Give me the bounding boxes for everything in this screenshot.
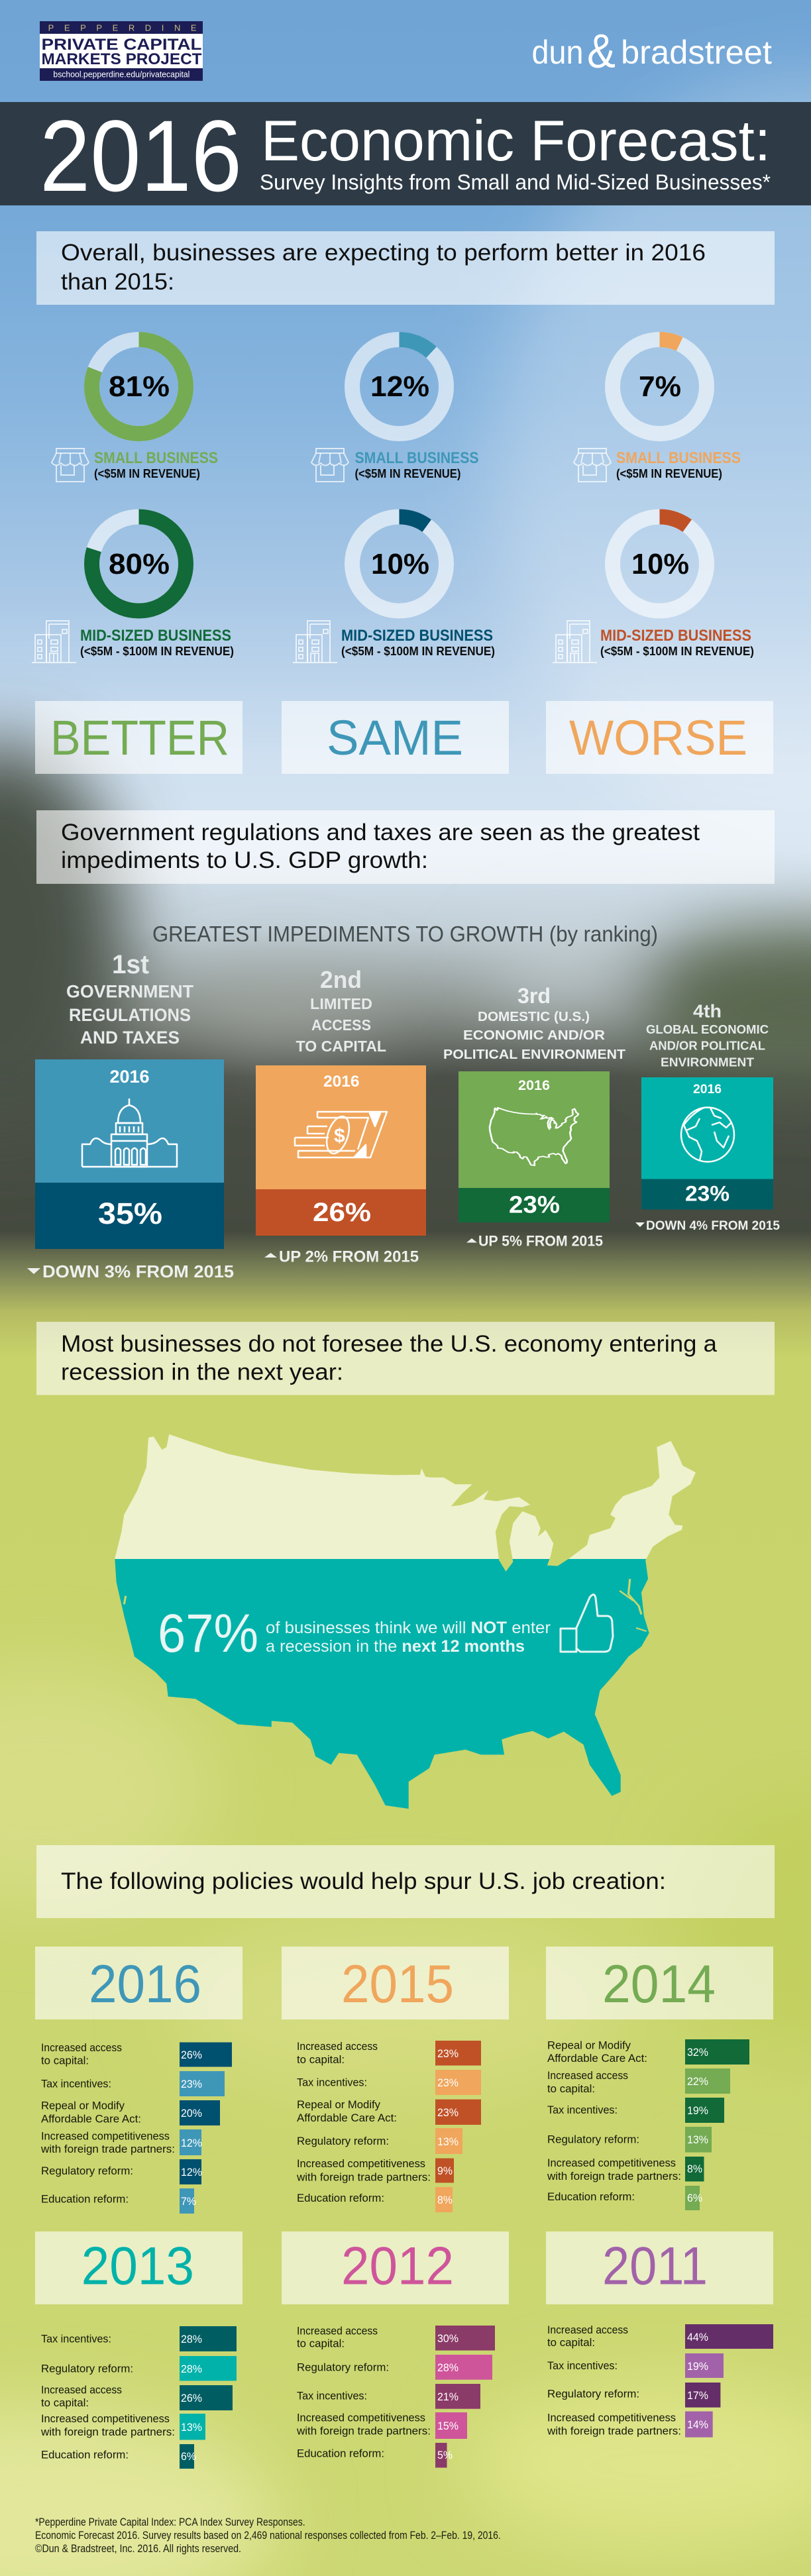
bar chart: 2012 policies: to capital: xyxy=(297,2338,345,2350)
icon: capitol building xyxy=(82,1099,177,1167)
bar chart: 2016 policies: 20% xyxy=(181,2107,202,2120)
label: mid-sized worse: MID-SIZED BUSINESS xyxy=(600,627,751,645)
callout: 67 percent xyxy=(158,1603,551,1664)
change: down 3%: DOWN 3% FROM 2015 xyxy=(42,1261,234,1281)
panel: heading job creation policies xyxy=(36,1845,775,1918)
bar chart: 2012 policies: 21% xyxy=(437,2390,459,2403)
bar chart: 2011 policies: 14% xyxy=(687,2418,708,2431)
bar chart: 2013 policies: Education reform: xyxy=(41,2449,129,2461)
label: small business better: SMALL BUSINESS xyxy=(94,449,218,467)
donut: small business better 81%: 81% xyxy=(109,370,170,403)
bar chart: 2012 policies: 15% xyxy=(437,2420,459,2432)
rank 2: limited access to capital: 2016 xyxy=(323,1073,359,1091)
bar chart: 2015 policies: 8% xyxy=(437,2194,453,2206)
legend: same: SAME xyxy=(327,710,463,765)
rank 3 heading: 3rd xyxy=(517,984,551,1008)
rank 4: global economic and political environment: 2016 xyxy=(693,1083,722,1097)
bar chart: 2015 policies xyxy=(296,2041,481,2212)
bar chart: 2016 policies: Regulatory reform: xyxy=(41,2165,133,2177)
title banner: 2016 xyxy=(40,99,242,213)
panel: heading recession xyxy=(36,1322,775,1395)
year box: 2012: 2012 xyxy=(341,2237,454,2296)
bar chart: 2014 policies: Tax incentives: xyxy=(547,2104,618,2116)
label: small business same xyxy=(311,449,478,482)
logo: dun & bradstreet: & xyxy=(587,25,616,78)
icon: flying money xyxy=(295,1112,387,1157)
bar chart: 2012 policies: with foreign trade partners: xyxy=(296,2425,431,2437)
change: up 2%: UP 2% FROM 2015 xyxy=(279,1248,419,1265)
chart title: GREATEST IMPEDIMENTS TO GROWTH (by ranking) xyxy=(152,922,658,946)
bar chart: 2016 policies: Increased competitiveness xyxy=(41,2130,170,2142)
bar chart: 2015 policies: Repeal or Modify xyxy=(297,2099,381,2111)
bar chart: 2014 policies: 19% xyxy=(687,2104,708,2117)
bar chart: 2014 policies: Regulatory reform: xyxy=(547,2134,639,2146)
rank 1 heading: 1st xyxy=(112,950,149,979)
bar chart: 2014 policies: with foreign trade partners: xyxy=(547,2171,681,2182)
rank 3 heading: POLITICAL ENVIRONMENT xyxy=(443,1047,625,1062)
bar chart: 2014 policies: 22% xyxy=(687,2075,708,2088)
donut: mid-sized better 80% xyxy=(91,517,186,611)
bar chart: 2012 policies: Increased access xyxy=(297,2326,378,2337)
rank 3 card xyxy=(459,1071,610,1188)
bar chart: 2014 policies: 6% xyxy=(687,2192,702,2204)
rank 3 heading: ECONOMIC AND/OR xyxy=(463,1028,606,1043)
logo: dun & bradstreet: bradstreet xyxy=(621,34,772,71)
year box: 2014: 2014 xyxy=(602,1955,716,2014)
rank 3 heading: DOMESTIC (U.S.) xyxy=(478,1010,590,1024)
bar chart: 2013 policies xyxy=(40,2326,237,2469)
bar chart: 2015 policies: Tax incentives: xyxy=(297,2077,367,2089)
label: small business same: (<$5M IN REVENUE) xyxy=(355,467,461,480)
rank 2 heading: LIMITED xyxy=(310,995,372,1012)
bar chart: 2016 policies: Affordable Care Act: xyxy=(41,2114,141,2125)
year box: 2013: 2013 xyxy=(81,2237,194,2296)
bar chart: 2015 policies: 9% xyxy=(437,2165,453,2177)
bar chart: 2015 policies: with foreign trade partners: xyxy=(296,2171,431,2183)
panel: heading recession: Most businesses do not foresee the U.S. economy entering a xyxy=(61,1331,718,1357)
bar chart: 2016 policies: Education reform: xyxy=(41,2194,129,2206)
bar chart: 2014 policies: 13% xyxy=(687,2133,708,2146)
callout: 67 percent: of businesses think we will NOT enter xyxy=(266,1619,551,1637)
bar chart: 2012 policies: 28% xyxy=(437,2361,459,2374)
bar chart: 2015 policies: 23% xyxy=(437,2106,459,2119)
bar chart: 2011 policies: Tax incentives: xyxy=(547,2360,618,2372)
footer notes: ©Dun & Bradstreet, Inc. 2016. All rights reserved. xyxy=(35,2542,241,2555)
rank 4: global economic and political environment xyxy=(635,1001,780,1233)
bar chart: 2015 policies: 23% xyxy=(437,2047,459,2060)
rank 1 heading: GOVERNMENT xyxy=(66,982,193,1002)
legend: same xyxy=(282,701,509,774)
bar chart: 2015 policies: Increased access xyxy=(297,2041,378,2053)
bar chart: 2013 policies: 28% xyxy=(181,2333,202,2345)
donut: mid-sized better 80%: 80% xyxy=(109,548,170,580)
bar chart: 2014 policies xyxy=(547,2039,749,2210)
bar chart: 2014 policies: Increased competitiveness xyxy=(547,2157,676,2169)
donut: small business better 81% xyxy=(91,339,186,433)
bar chart: 2016 policies: with foreign trade partners: xyxy=(40,2143,175,2155)
bar chart: 2014 policies: 32% xyxy=(687,2046,708,2059)
bar chart: 2012 policies: 5% xyxy=(437,2449,453,2461)
bar chart: 2011 policies: with foreign trade partners: xyxy=(547,2425,681,2437)
bar chart: 2012 policies: 30% xyxy=(437,2332,459,2345)
year box: 2014 xyxy=(546,1947,773,2019)
change: up 5%: UP 5% FROM 2015 xyxy=(478,1232,603,1250)
label: mid-sized better: (<$5M - $100M IN REVENUE) xyxy=(80,645,234,658)
footer notes: Economic Forecast 2016. Survey results based on 2,469 national responses collected from Feb. 2–Feb. 19, 2016. xyxy=(35,2529,501,2542)
bar chart: 2013 policies: Increased competitiveness xyxy=(41,2413,170,2425)
label: small business worse: SMALL BUSINESS xyxy=(616,449,741,467)
label: small business same: SMALL BUSINESS xyxy=(355,449,478,467)
panel: heading overall expectations: Overall, businesses are expecting to perform better in 2016 xyxy=(61,240,706,266)
bar chart: 2013 policies: 13% xyxy=(181,2421,202,2434)
callout: 67 percent: 67% xyxy=(158,1603,258,1664)
footer notes: *Pepperdine Private Capital Index: PCA Index Survey Responses. xyxy=(35,2516,305,2528)
rank 2 heading: TO CAPITAL xyxy=(296,1038,386,1055)
year box: 2012 xyxy=(282,2231,509,2304)
icon: globe xyxy=(681,1108,734,1162)
rank 1: government regulations and taxes xyxy=(27,950,234,1281)
map: usa filled to 67 percent xyxy=(115,1434,696,1809)
bar chart: 2016 policies: Increased access xyxy=(41,2042,122,2054)
bar chart: 2011 policies: to capital: xyxy=(547,2337,595,2349)
year box: 2016: 2016 xyxy=(89,1955,201,2014)
rank 3: domestic economic and political environment xyxy=(443,984,625,1250)
label: small business better xyxy=(52,449,218,482)
change: down 4%: DOWN 4% FROM 2015 xyxy=(646,1219,780,1233)
panel: heading recession: recession in the next year: xyxy=(61,1360,343,1385)
panel: heading government regulations: impediments to U.S. GDP growth: xyxy=(61,847,428,873)
bar chart: 2014 policies: Repeal or Modify xyxy=(547,2039,631,2051)
year box: 2011: 2011 xyxy=(602,2237,708,2296)
donut: mid-sized same 10% xyxy=(352,517,447,611)
bar chart: 2016 policies: 23% xyxy=(181,2078,202,2090)
rank 4 heading: AND/OR POLITICAL xyxy=(649,1040,765,1053)
panel: heading overall expectations xyxy=(36,231,775,305)
bar chart: 2013 policies: Increased access xyxy=(41,2385,122,2396)
label: mid-sized worse: (<$5M - $100M IN REVENUE) xyxy=(600,645,754,658)
label: small business better: (<$5M IN REVENUE) xyxy=(94,467,200,480)
logo: Pepperdine Private Capital Markets Project xyxy=(40,21,203,81)
bar chart: 2016 policies: Tax incentives: xyxy=(41,2078,111,2090)
footer notes xyxy=(35,2516,501,2555)
bar chart: 2015 policies: Education reform: xyxy=(297,2192,384,2204)
bar chart: 2016 policies: to capital: xyxy=(41,2055,89,2067)
bar chart: 2012 policies: Tax incentives: xyxy=(297,2390,367,2402)
label: small business worse: (<$5M IN REVENUE) xyxy=(616,467,722,480)
year box: 2016 xyxy=(35,1947,243,2019)
bar chart: 2016 policies: 12% xyxy=(181,2137,202,2149)
bar chart: 2012 policies: Regulatory reform: xyxy=(297,2361,389,2373)
donut: small business same 12%: 12% xyxy=(370,370,429,403)
legend: worse xyxy=(546,701,773,774)
panel: heading job creation policies: The following policies would help spur U.S. job creation: xyxy=(61,1868,666,1894)
bar chart: 2013 policies: Regulatory reform: xyxy=(41,2363,133,2375)
donut: small business worse 7% xyxy=(612,339,706,433)
label: mid-sized same: (<$5M - $100M IN REVENUE) xyxy=(341,645,495,658)
logo: dun & bradstreet: dun xyxy=(531,34,583,71)
bar chart: 2011 policies: Increased access xyxy=(547,2324,628,2336)
title banner: Survey Insights from Small and Mid-Sized Businesses* xyxy=(260,170,771,194)
bar chart: 2014 policies: Affordable Care Act: xyxy=(547,2053,647,2065)
rank 4 heading xyxy=(646,1001,769,1069)
rank 1 heading xyxy=(66,950,193,1047)
bar chart: 2015 policies: Increased competitiveness xyxy=(297,2158,425,2170)
bar chart: 2014 policies: Increased access xyxy=(547,2070,628,2082)
rank 3: domestic economic and political environment: 23% xyxy=(509,1191,560,1218)
donut: mid-sized same 10%: 10% xyxy=(371,548,429,580)
bar chart: 2011 policies: Increased competitiveness xyxy=(547,2412,676,2424)
panel: heading government regulations: Government regulations and taxes are seen as the greatest xyxy=(61,820,700,845)
rank 1: government regulations and taxes: 35% xyxy=(98,1197,162,1230)
title banner xyxy=(0,99,811,213)
year box: 2013 xyxy=(35,2231,243,2304)
bar chart: 2015 policies: Regulatory reform: xyxy=(297,2135,389,2147)
bar chart: 2013 policies: Tax incentives: xyxy=(41,2334,111,2345)
rank 2: limited access to capital: 26% xyxy=(313,1198,371,1227)
rank 4 heading: GLOBAL ECONOMIC xyxy=(646,1023,769,1036)
logo: dun & bradstreet xyxy=(531,25,772,78)
rank 1 heading: REGULATIONS xyxy=(69,1005,191,1025)
bar chart: 2012 policies: Increased competitiveness xyxy=(297,2412,425,2424)
rank 3: domestic economic and political environment: 2016 xyxy=(518,1078,550,1093)
year box: 2015: 2015 xyxy=(341,1955,454,2014)
rank 4 heading: ENVIRONMENT xyxy=(661,1056,754,1069)
bar chart: 2016 policies: 7% xyxy=(181,2195,196,2208)
label: small business worse xyxy=(574,449,741,482)
rank 2 heading xyxy=(296,966,386,1055)
bar chart: 2016 policies: Repeal or Modify xyxy=(41,2100,125,2112)
label: mid-sized better xyxy=(32,621,234,663)
year box: 2011 xyxy=(546,2231,773,2304)
bar chart: 2011 policies: 17% xyxy=(687,2389,708,2402)
bar chart: 2013 policies: 28% xyxy=(181,2363,202,2375)
bar chart: 2014 policies: 8% xyxy=(687,2163,702,2175)
label: mid-sized better: MID-SIZED BUSINESS xyxy=(80,627,231,645)
bar chart: 2011 policies: 44% xyxy=(687,2331,708,2343)
legend: worse: WORSE xyxy=(569,710,747,765)
icon: usa outline xyxy=(490,1108,578,1165)
title banner: Economic Forecast: xyxy=(261,109,771,173)
donut: small business worse 7%: 7% xyxy=(639,370,681,403)
donut: mid-sized worse 10% xyxy=(612,517,706,611)
bar chart: 2011 policies: Regulatory reform: xyxy=(547,2388,639,2400)
rank 4 heading: 4th xyxy=(693,1001,722,1022)
label: mid-sized worse xyxy=(553,621,754,663)
rank 1 heading: AND TAXES xyxy=(80,1028,180,1047)
rank 4 card xyxy=(641,1077,773,1179)
rank 2: limited access to capital xyxy=(256,966,426,1265)
bar chart: 2013 policies: to capital: xyxy=(41,2397,89,2409)
bar chart: 2014 policies: to capital: xyxy=(547,2083,595,2095)
rank 2 card xyxy=(256,1065,426,1189)
bar chart: 2016 policies: 26% xyxy=(181,2049,202,2061)
rank 1 card xyxy=(35,1059,224,1183)
donut: small business same 12% xyxy=(352,339,447,433)
year box: 2015 xyxy=(282,1947,509,2019)
rank 2 heading: ACCESS xyxy=(311,1016,371,1034)
bar chart: 2015 policies: 13% xyxy=(437,2135,459,2148)
callout: 67 percent: a recession in the next 12 months xyxy=(266,1637,525,1656)
donut: mid-sized worse 10%: 10% xyxy=(631,548,689,580)
logo: Pepperdine Private Capital Markets Project: PRIVATE CAPITAL xyxy=(41,36,201,54)
rank 2 heading: 2nd xyxy=(320,966,362,993)
icon: thumbs up xyxy=(561,1595,613,1652)
bar chart: 2011 policies: 19% xyxy=(687,2360,708,2373)
bar chart: 2015 policies: Affordable Care Act: xyxy=(297,2112,397,2124)
logo: Pepperdine Private Capital Markets Project: MARKETS PROJECT xyxy=(41,50,202,68)
logo: Pepperdine Private Capital Markets Project: bschool.pepperdine.edu/privatecapital xyxy=(53,70,189,80)
logo: Pepperdine Private Capital Markets Project: PEPPERDINE xyxy=(48,23,197,33)
rank 3 heading xyxy=(443,984,625,1062)
bar chart: 2013 policies: 6% xyxy=(181,2450,196,2463)
rank 2: limited access to capital: $ xyxy=(334,1125,345,1147)
label: mid-sized same: MID-SIZED BUSINESS xyxy=(341,627,493,645)
bar chart: 2013 policies: 26% xyxy=(181,2392,202,2404)
rank 1: government regulations and taxes: 2016 xyxy=(110,1067,150,1087)
bar chart: 2016 policies xyxy=(40,2042,232,2214)
rank 4: global economic and political environment: 23% xyxy=(685,1182,730,1206)
bar chart: 2014 policies: Education reform: xyxy=(547,2191,635,2203)
bar chart: 2015 policies: 23% xyxy=(437,2076,459,2089)
bar chart: 2012 policies xyxy=(296,2326,495,2467)
bar chart: 2011 policies xyxy=(547,2324,773,2438)
bar chart: 2013 policies: with foreign trade partners: xyxy=(40,2426,175,2438)
bar chart: 2015 policies: to capital: xyxy=(297,2054,345,2066)
panel: heading overall expectations: than 2015: xyxy=(61,269,174,295)
bar chart: 2016 policies: 12% xyxy=(181,2166,202,2178)
legend: better xyxy=(35,701,243,774)
legend: better: BETTER xyxy=(50,710,229,765)
label: mid-sized same xyxy=(293,621,495,663)
panel: heading government regulations xyxy=(36,810,775,884)
bar chart: 2012 policies: Education reform: xyxy=(297,2448,384,2460)
